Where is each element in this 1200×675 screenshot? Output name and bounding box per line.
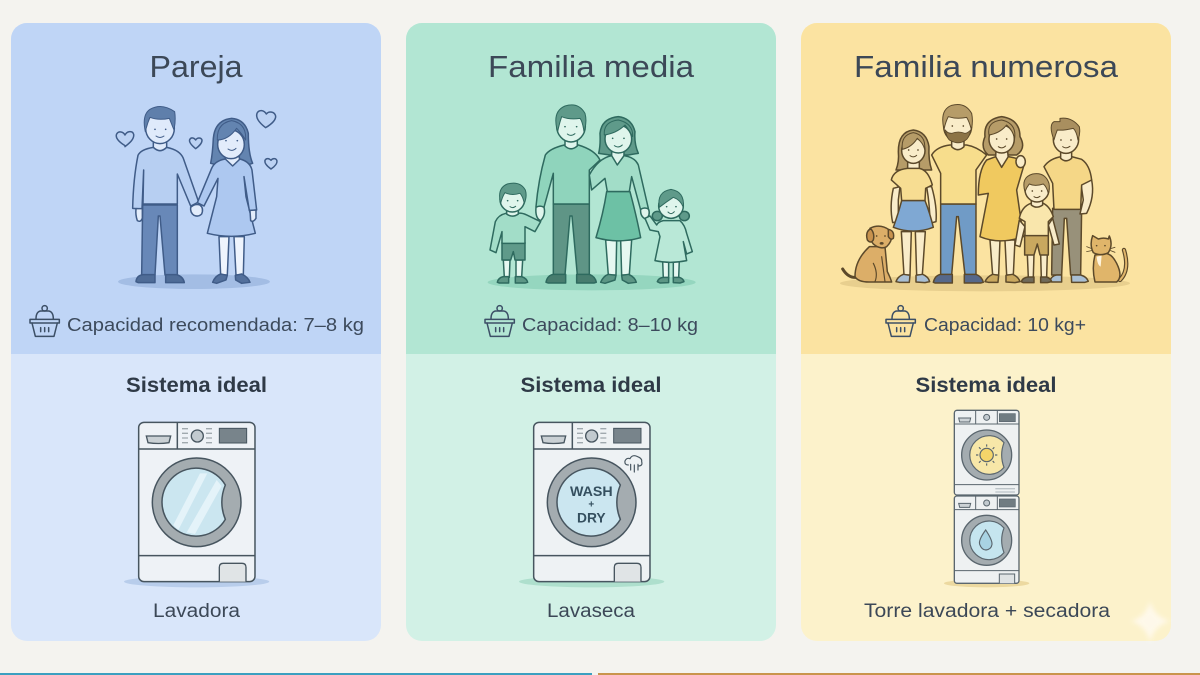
icon: sparkle watermark: [1131, 601, 1170, 642]
older son: [1044, 118, 1093, 282]
girl: [645, 189, 692, 283]
girl: [891, 130, 936, 283]
father: [932, 104, 987, 283]
icon: laundry basket: [485, 306, 514, 336]
text: WASH + DRY: +: [588, 500, 594, 511]
subheading: Sistema ideal: Sistema ideal: [520, 374, 662, 397]
panel: Pareja: [11, 23, 381, 641]
hearts: [116, 111, 277, 169]
text: capacity: Capacidad: 8–10 kg: [522, 314, 698, 335]
panel: Familia media: [406, 23, 776, 641]
text: WASH + DRY: DRY: [577, 509, 606, 525]
capacity: basket icon and label: [485, 306, 698, 336]
label: Lavadora: Lavadora: [153, 601, 240, 622]
cat: [1087, 236, 1126, 282]
text: WASH + DRY: WASH: [570, 483, 613, 499]
text: WASH + DRY: [570, 483, 613, 525]
illustration: family of four: [488, 105, 696, 290]
subheading: Sistema ideal: Sistema ideal: [916, 374, 1056, 397]
heading: Familia media: Familia media: [488, 49, 695, 84]
illustration: washing machine: [124, 422, 269, 587]
woman: [191, 118, 257, 283]
icon: laundry basket: [30, 306, 59, 336]
man: [133, 106, 199, 283]
bottom bar: teal segment: [0, 673, 592, 675]
dryer: [954, 410, 1019, 495]
father: [536, 105, 600, 283]
bottom bar: orange segment: [598, 673, 1200, 675]
illustration: washer-dryer: [519, 422, 664, 587]
text: capacity: Capacidad: 10 kg+: [924, 314, 1086, 335]
dog: [843, 226, 894, 282]
capacity: basket icon and label: [30, 306, 364, 336]
heading: Pareja: Pareja: [150, 49, 243, 84]
text: recommended capacity: Capacidad recomendada: 7–8 kg: [67, 314, 364, 335]
illustration: couple holding hands: [116, 106, 277, 289]
panel: Familia numerosa: [801, 23, 1171, 641]
subheading: Sistema ideal: Sistema ideal: [126, 374, 267, 397]
mother: [978, 117, 1025, 283]
boy: [490, 183, 541, 283]
washer: [954, 496, 1019, 583]
illustration: large family with pets: [840, 104, 1130, 291]
label: Torre lavadora + secadora: Torre lavadora + secadora: [864, 601, 1110, 622]
label: Lavaseca: Lavaseca: [547, 601, 635, 622]
younger son: [1015, 174, 1059, 283]
heading: Familia numerosa: Familia numerosa: [854, 49, 1119, 84]
mother: [589, 117, 649, 283]
icon: laundry basket: [886, 306, 915, 336]
capacity: basket icon and label: [886, 306, 1086, 336]
illustration: stacked washer and dryer tower: [944, 410, 1029, 587]
